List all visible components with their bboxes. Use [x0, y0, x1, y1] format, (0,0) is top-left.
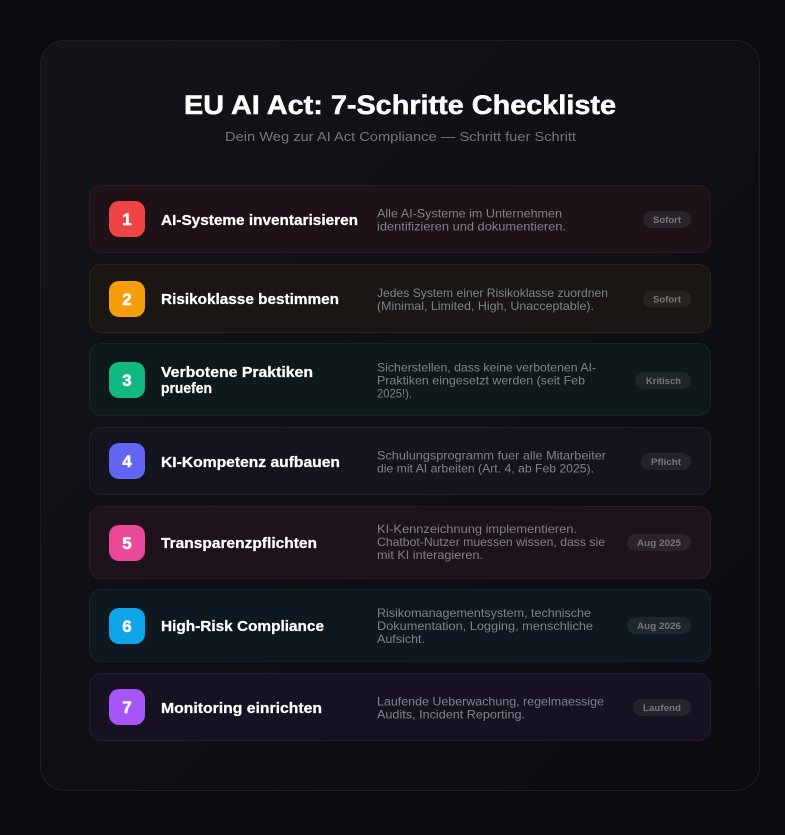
step 7 tag: Laufend — [643, 703, 681, 714]
step 7 description — [377, 694, 604, 722]
step 1 tag — [643, 211, 691, 228]
step 6 description: Risikomanagementsystem, technische — [377, 606, 591, 620]
step 2 tag: Sofort — [653, 294, 682, 306]
step 3 — [90, 344, 710, 416]
step 6 heading: High-Risk Compliance — [161, 618, 324, 635]
step 3 heading: Verbotene Praktiken — [161, 364, 313, 381]
number badge 5: 5 — [122, 534, 132, 553]
step 7 description: Audits, Incident Reporting. — [377, 708, 525, 722]
step 2 — [90, 264, 710, 332]
number badge 6 — [109, 608, 145, 644]
step 5 description: Chatbot-Nutzer muessen wissen, dass sie — [377, 535, 605, 549]
step 6 tag: Aug 2026 — [637, 621, 681, 632]
step 4 description: die mit AI arbeiten (Art. 4, ab Feb 2025). — [377, 462, 594, 476]
number badge 2 — [109, 281, 145, 317]
number badge 1 — [109, 201, 145, 237]
step 6 description — [377, 606, 593, 646]
step 7 tag — [633, 699, 691, 716]
step 7 — [90, 674, 710, 740]
subtitle: Dein Weg zur AI Act Compliance — Schritt fuer Schritt — [225, 129, 576, 144]
step 4 tag — [641, 453, 691, 470]
step 3 heading — [161, 364, 313, 397]
step 3 description — [377, 360, 596, 400]
step 3 description: 2025!). — [377, 386, 412, 400]
step 4 heading: KI-Kompetenz aufbauen — [161, 454, 340, 471]
step 4 tag: Pflicht — [651, 457, 682, 468]
step 5 heading: Transparenzpflichten — [161, 535, 317, 552]
number badge 5 — [109, 525, 145, 561]
number badge 6: 6 — [122, 617, 132, 636]
step 4 description: Schulungsprogramm fuer alle Mitarbeiter — [377, 448, 606, 462]
step 5 tag — [627, 534, 691, 551]
step 1 — [90, 186, 710, 252]
step 3 heading: pruefen — [161, 380, 212, 397]
step 1 heading: AI-Systeme inventarisieren — [161, 212, 358, 229]
step 5 tag: Aug 2025 — [637, 538, 682, 549]
step 1 tag: Sofort — [653, 215, 682, 226]
title: EU AI Act: 7-Schritte Checkliste — [184, 90, 616, 120]
step 5 description — [377, 522, 605, 562]
step 7 heading: Monitoring einrichten — [161, 700, 322, 717]
step 4 description — [377, 448, 606, 476]
step 6 tag — [627, 617, 691, 634]
number badge 3: 3 — [122, 371, 132, 390]
number badge 2: 2 — [122, 290, 132, 309]
step 6 description: Dokumentation, Logging, menschliche — [377, 619, 593, 633]
step 1 description — [377, 206, 566, 234]
number badge 7 — [109, 689, 145, 725]
number badge 7: 7 — [122, 698, 132, 717]
step 3 tag — [635, 372, 691, 389]
number badge 3 — [109, 362, 145, 398]
step 3 description: Praktiken eingesetzt werden (seit Feb — [377, 374, 585, 388]
step 2 heading: Risikoklasse bestimmen — [161, 291, 339, 308]
step 2 description — [377, 286, 608, 313]
number badge 4 — [109, 443, 145, 479]
step 1 description: Alle AI-Systeme im Unternehmen — [377, 206, 562, 220]
number badge 1: 1 — [122, 210, 132, 229]
step 3 description: Sicherstellen, dass keine verbotenen AI- — [377, 360, 596, 374]
step 6 description: Aufsicht. — [377, 632, 425, 646]
number badge 4: 4 — [122, 452, 132, 471]
step 4 — [90, 428, 710, 494]
step 2 description: Jedes System einer Risikoklasse zuordnen — [377, 286, 608, 300]
step 3 tag: Kritisch — [646, 376, 681, 387]
step 1 description: identifizieren und dokumentieren. — [377, 220, 566, 234]
step 7 description: Laufende Ueberwachung, regelmaessige — [377, 694, 604, 708]
step 6 — [90, 590, 710, 662]
step 5 description: KI-Kennzeichnung implementieren. — [377, 522, 577, 536]
step 5 description: mit KI interagieren. — [377, 548, 483, 562]
step 5 — [90, 506, 710, 578]
step 2 description: (Minimal, Limited, High, Unacceptable). — [377, 299, 594, 313]
step 2 tag — [643, 290, 691, 308]
